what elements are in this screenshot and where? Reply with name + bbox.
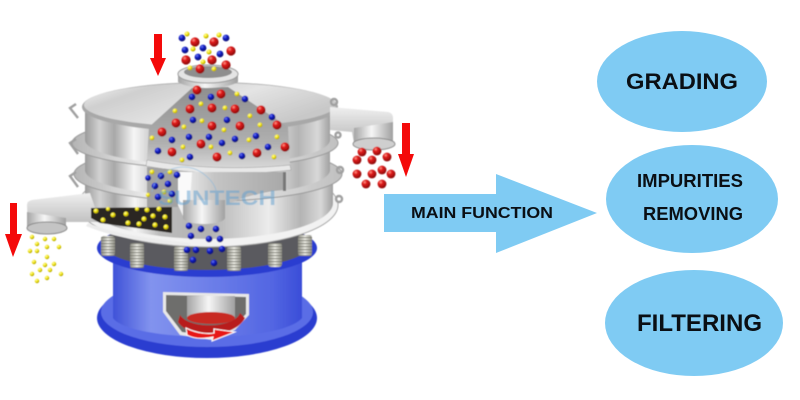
feed inlet collar xyxy=(178,65,238,88)
icon: red arrow, feed xyxy=(150,34,166,76)
window showing vibration motor xyxy=(163,292,249,341)
function: impurities removing: REMOVING xyxy=(643,204,743,224)
watermark xyxy=(152,167,276,210)
particles: blue xyxy=(145,35,275,266)
discharge spout: right xyxy=(330,107,395,150)
icon: rotation arrow xyxy=(186,328,235,341)
icon: red arrow, right discharge xyxy=(398,123,414,177)
support springs xyxy=(101,235,312,271)
particles: red xyxy=(157,37,395,188)
function: grading xyxy=(597,31,767,132)
cutaway: upper chamber xyxy=(146,87,291,173)
discharge spout: left xyxy=(27,193,100,234)
arrow: main function xyxy=(384,174,597,253)
cutaway: lower chamber with funnel xyxy=(147,167,286,224)
machine base: blue drum xyxy=(97,218,317,358)
rim clamps xyxy=(70,99,343,202)
function: impurities removing: IMPURITIES xyxy=(637,171,743,191)
function: filtering: FILTERING xyxy=(637,310,762,337)
function: filtering xyxy=(605,270,783,376)
function: impurities removing xyxy=(606,145,778,253)
arrow: main function: MAIN FUNCTION xyxy=(411,205,553,222)
function: grading: GRADING xyxy=(626,69,738,94)
cutaway: yellow fines tray xyxy=(86,207,190,246)
illustration: vibrating sieve machine xyxy=(27,32,395,358)
particles: yellow xyxy=(28,32,279,283)
sieve tiers xyxy=(72,82,342,247)
watermark: SUNTECH xyxy=(158,187,276,210)
icon: red arrow, left discharge xyxy=(5,203,22,257)
